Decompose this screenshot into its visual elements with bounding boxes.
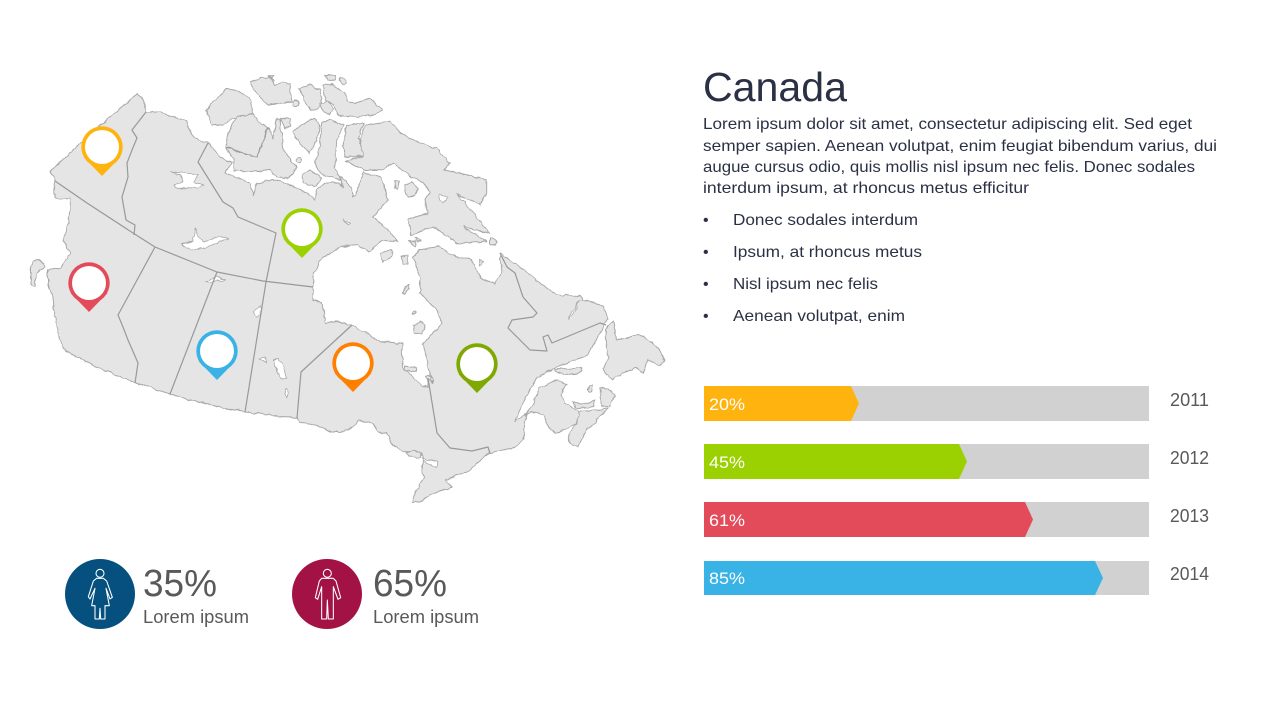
bullet list: Donec sodales interdum [733,212,918,229]
bullet list: • [703,244,709,261]
bullet list: • [703,212,709,229]
pin: red [68,262,110,312]
mainland [48,93,608,502]
bar: 2012: 45% [709,453,745,472]
province boundaries [55,112,606,453]
bullet list: • [703,308,709,325]
coastlines [31,75,665,502]
bar: 2014 [704,561,1209,595]
body paragraph: interdum ipsum, at rhoncus metus efficitur [703,180,1030,197]
bar: 2014: 2014 [1170,564,1209,584]
bar: 2013 [704,502,1209,537]
icon: man [292,559,362,629]
Ellesmere island [323,84,382,117]
figure: 35%: 35% [143,563,217,605]
bullet list: Ipsum, at rhoncus metus [733,244,922,261]
bullet list: • [703,276,709,293]
body paragraph: Lorem ipsum dolor sit amet, consectetur adipiscing elit. Sed eget [703,116,1193,133]
bar: 2012 [704,444,1209,479]
Atlantic islands and Maritimes [403,285,665,467]
stat: female 35% [65,559,249,629]
bar: 2014: 85% [709,569,745,588]
map of Canada [31,75,665,502]
bar: 2013: 2013 [1170,506,1209,526]
pin: yellow [81,126,123,176]
body paragraph: semper sapien. Aenean volutpat, enim feugiat bibendum varius, dui [703,138,1217,155]
stat: male 65% [292,559,479,629]
pin: green [281,208,323,258]
bar: 2011 [704,386,1209,421]
bar: 2013: 61% [709,511,745,530]
pin: blue [196,330,238,380]
bar: 2012: 2012 [1170,448,1209,468]
figure: 65%: 65% [373,563,447,605]
bar: 2011: 2011 [1170,390,1209,410]
caption: Lorem ipsum [143,607,249,627]
pin: orange [332,342,374,392]
body paragraph: augue cursus odio, quis mollis nisl ipsum nec felis. Donec sodales [703,159,1195,176]
bullet list [703,212,922,325]
icon: woman [65,559,135,629]
arctic islands (western) [31,75,346,287]
caption: Lorem ipsum [373,607,479,627]
pin: olive [456,343,498,393]
bar: 2011: 20% [709,395,745,414]
Baffin and eastern arctic islands [343,122,497,293]
bullet list: Nisl ipsum nec felis [733,276,878,293]
bar chart [704,386,1209,595]
body paragraph [703,116,1217,197]
title: Canada [703,64,847,110]
bullet list: Aenean volutpat, enim [733,308,905,325]
lakes [170,172,350,283]
